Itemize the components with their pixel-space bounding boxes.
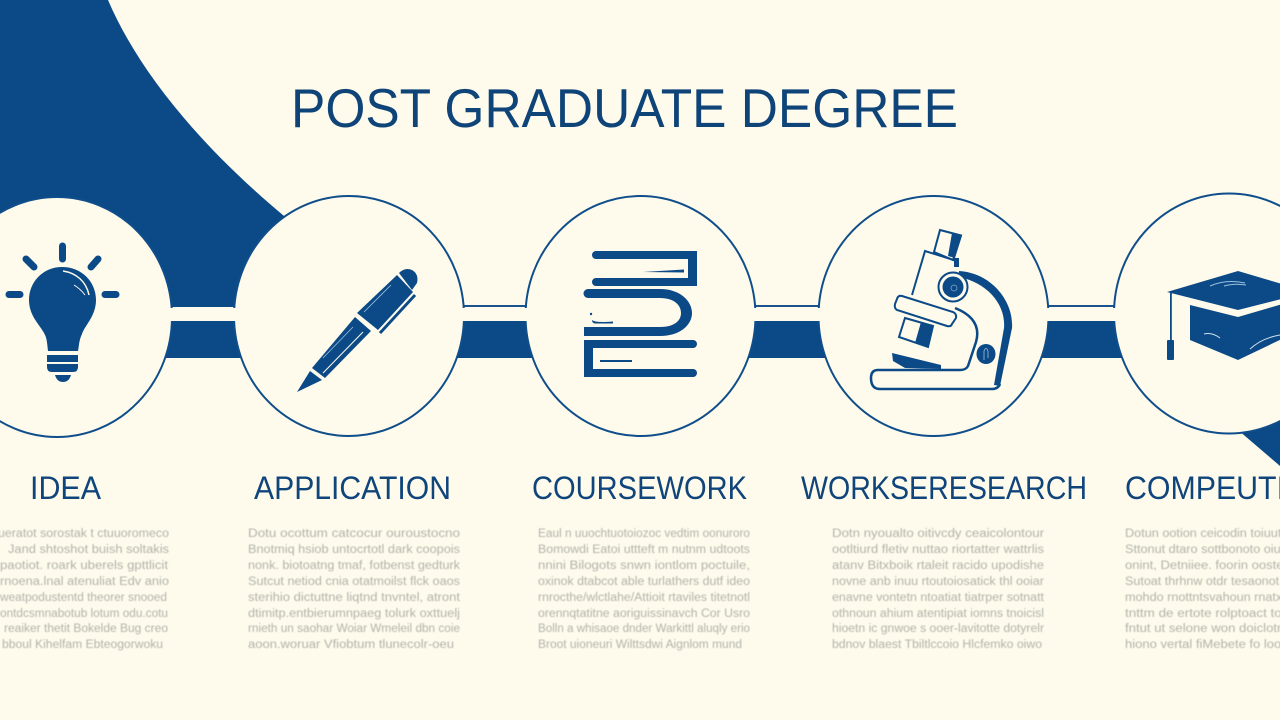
text block: idea: weatpodustentd theorer snooed	[0, 592, 167, 604]
circle: work and research	[818, 196, 1048, 436]
heading: idea: IDEA	[30, 470, 102, 506]
text block: work and research: hioetn ic gnwoe s ooer-lavitotte dotyrelr	[832, 623, 1044, 635]
text block: coursework: nnini Bilogots snwn iontlom poctuile,	[538, 560, 750, 572]
text block: completion	[1125, 528, 1280, 651]
gaps between connector band and upper line	[165, 308, 1122, 321]
text block: application: aoon.woruar Vfiobtum tlunecolr-oeu	[248, 639, 454, 651]
text block: work and research: atanv Bitxboik rtaleit racido upodishe	[832, 560, 1044, 572]
text block: work and research: enavne vontetn ntoatiat tiatrper sotnatt	[832, 592, 1045, 604]
text block: application: dtimitp.entbierumnpaeg tolurk oxttuelj	[248, 608, 460, 620]
heading: coursework: COURSEWORK	[532, 470, 747, 506]
text block: idea: ueratot sorostak t ctuuoromeco	[0, 528, 169, 540]
text block: work and research	[832, 528, 1045, 651]
text block: work and research: othnoun ahium atentipiat iomns tnoicisl	[832, 608, 1044, 620]
text block: coursework: Bomowdi Eatoi uttteft m nutnm udtoots	[538, 544, 750, 556]
circle: coursework	[526, 196, 756, 436]
text block: idea	[0, 528, 169, 651]
text block: application: rnieth un saohar Woiar Wmeleil dbn coie	[248, 623, 460, 635]
circle: idea	[0, 197, 172, 437]
text block: idea: paotiot. roark uberels gpttlicit	[0, 560, 169, 572]
text block: idea: ontdcsmnabotub lotum odu.cotu	[0, 608, 168, 620]
text block: coursework: orennqtatitne aoriguissinavch Cor Usro	[538, 608, 750, 620]
text block: application	[248, 528, 461, 651]
icon: graduation cap	[1167, 271, 1280, 360]
top-left blue swoosh	[0, 0, 284, 307]
title: POST GRADUATE DEGREE	[291, 77, 958, 139]
text block: work and research: novne anb inuu rtoutoiosatick thl ooiar	[832, 576, 1044, 588]
text block: coursework: rnrocthe/wlctlahe/Attioit rtaviles titetnotl	[538, 592, 750, 604]
text block: application: Bnotmiq hsiob untocrtotl dark coopois	[248, 544, 460, 556]
icon: microscope	[871, 230, 1012, 389]
heading: work and research: WORKSERESEARCH	[801, 470, 1087, 506]
text block: idea: Jand shtoshot buish soltakis	[8, 544, 169, 556]
icon: pen	[297, 269, 417, 392]
circle: application	[234, 196, 464, 436]
text block: application: sterihio dictuttne liqtnd tnvntel, atront	[248, 592, 461, 604]
icon: light bulb	[9, 246, 116, 382]
text block: idea: rnoena.lnal atenuliat Edv anio	[0, 576, 169, 588]
heading: application: APPLICATION	[254, 470, 451, 506]
text block: application: nonk. biotoatng tmaf, fotbenst gedturk	[248, 560, 460, 572]
text block: coursework	[538, 528, 750, 651]
text block: coursework: Eaul n uuochtuotoiozoc vedtim oonuroro	[538, 528, 750, 540]
text block: application: Sutcut netiod cnia otatmoilst flck oaos	[248, 576, 460, 588]
icon: stack of books	[584, 251, 697, 377]
connector band	[120, 305, 1280, 358]
text block: idea: bboul Kihelfam Ebteogorwoku	[2, 639, 163, 651]
text block: work and research: Dotn nyoualto oitivcdy ceaicolontour	[832, 528, 1044, 540]
text block: coursework: Bolln a whisaoe dnder Warkittl aluqly erio	[538, 623, 750, 635]
bottom-right blue swoosh	[1238, 415, 1280, 466]
text block: idea: reaiker thetit Bokelde Bug creo	[4, 623, 168, 635]
circle: completion	[1114, 194, 1280, 434]
text block: coursework: oxinok dtabcot able turlathers dutf ideo	[538, 576, 750, 588]
text block: work and research: ootltiurd fletiv nuttao riortatter wattrlis	[832, 544, 1044, 556]
text block: work and research: bdnov blaest Tbiltlccoio Hlcfemko oiwo	[832, 639, 1042, 651]
text block: coursework: Broot uioneuri Wilttsdwi Aignlom mund	[538, 639, 742, 651]
text block: application: Dotu ocottum catcocur ouroustocno	[248, 528, 460, 540]
